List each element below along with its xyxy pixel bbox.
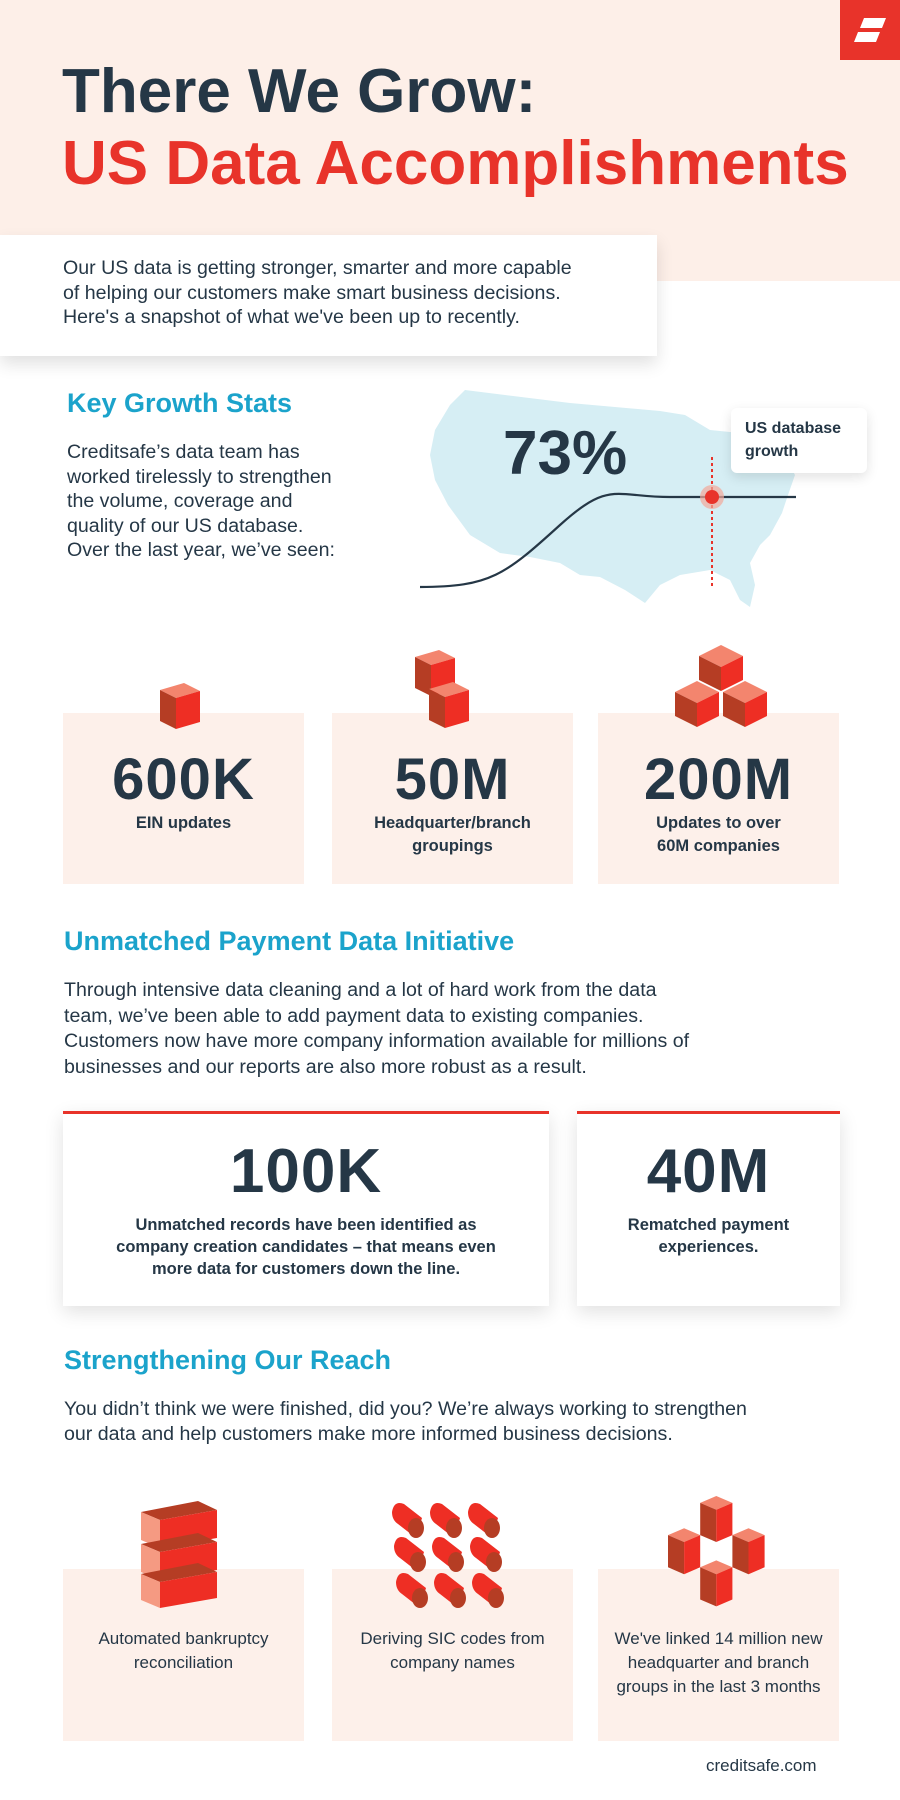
intro box [0,235,657,356]
unmatched paragraph: Customers now have more company information available for millions of [64,1030,689,1052]
card: SIC codes: company names [390,1653,515,1672]
card: 50M [332,713,573,884]
reach paragraph: You didn’t think we were finished, did you? We’re always working to strengthen [64,1398,747,1420]
unmatched paragraph [64,979,690,1078]
intro box: Here's a snapshot of what we've been up to recently. [63,306,520,328]
unmatched paragraph: businesses and our reports are also more robust as a result. [64,1056,587,1078]
card: 40M: 40M [647,1137,770,1206]
card: 200M [598,713,839,884]
title: US Data Accomplishments [62,129,849,198]
icon: cylinders grid [392,1503,504,1608]
card: 600K: EIN updates [136,814,231,832]
title [62,57,849,198]
icon: single cube [160,683,200,729]
logo [840,0,900,60]
card: 100K [63,1111,549,1306]
card: 100K: company creation candidates – that means even [116,1238,496,1256]
map chart [420,390,796,607]
label: US database growth: US database growth [745,420,841,460]
card: 200M: 200M [644,747,793,812]
reach paragraph: our data and help customers make more informed business decisions. [64,1423,673,1445]
card: 600K [63,713,304,884]
card: bankruptcy: Automated bankruptcy [98,1629,269,1648]
card: 50M: 50M [395,747,510,812]
card: SIC codes: Deriving SIC codes from [360,1629,545,1648]
heading: unmatched payment: Unmatched Payment Data Initiative [64,926,514,956]
key growth paragraph: quality of our US database. [67,514,303,536]
card: 200M: Updates to over [656,814,781,832]
card: 40M [577,1111,840,1306]
key growth paragraph: the volume, coverage and [67,490,292,512]
card: linked groups: groups in the last 3 months [616,1677,821,1696]
key growth paragraph [67,441,335,561]
key growth paragraph: Over the last year, we’ve seen: [67,539,335,561]
unmatched paragraph: team, we’ve been able to add payment data to existing companies. [64,1004,643,1026]
card: bankruptcy: reconciliation [134,1653,233,1672]
card: 600K: 600K [112,747,255,812]
card: 100K: Unmatched records have been identified as [135,1216,477,1234]
card: 100K: 100K [230,1137,382,1206]
card: 100K: more data for customers down the line. [152,1260,460,1278]
card: SIC codes [332,1569,573,1741]
title: There We Grow: [62,57,536,126]
key growth paragraph: worked tirelessly to strengthen [67,466,332,488]
growth curve [420,494,796,587]
footer url: creditsafe.com [706,1756,817,1775]
intro box: Our US data is getting stronger, smarter and more capable [63,257,572,279]
intro box: of helping our customers make smart business decisions. [63,282,561,304]
card: linked groups [598,1569,839,1741]
card: 50M: groupings [412,837,493,855]
card: 40M: experiences. [658,1238,758,1256]
unmatched paragraph: Through intensive data cleaning and a lot of hard work from the data [64,979,657,1001]
icon: stacked slabs [141,1501,217,1608]
us map [430,390,795,607]
card: 200M: 60M companies [657,837,780,855]
card: linked groups: We've linked 14 million new [614,1629,822,1648]
stat: 73%: 73% [503,419,627,488]
header background [0,0,900,281]
heading: strengthening reach: Strengthening Our Reach [64,1345,391,1375]
reach paragraph [64,1398,747,1445]
card: bankruptcy [63,1569,304,1741]
card: linked groups: headquarter and branch [628,1653,809,1672]
heading: key growth stats: Key Growth Stats [67,388,292,418]
label: US database growth [731,408,867,473]
card: 40M: Rematched payment [628,1216,789,1234]
icon: cube cross [668,1496,765,1606]
icon: two cubes [415,650,469,728]
key growth paragraph: Creditsafe’s data team has [67,441,300,463]
card: 50M: Headquarter/branch [374,814,531,832]
icon: cube pyramid [675,645,767,727]
